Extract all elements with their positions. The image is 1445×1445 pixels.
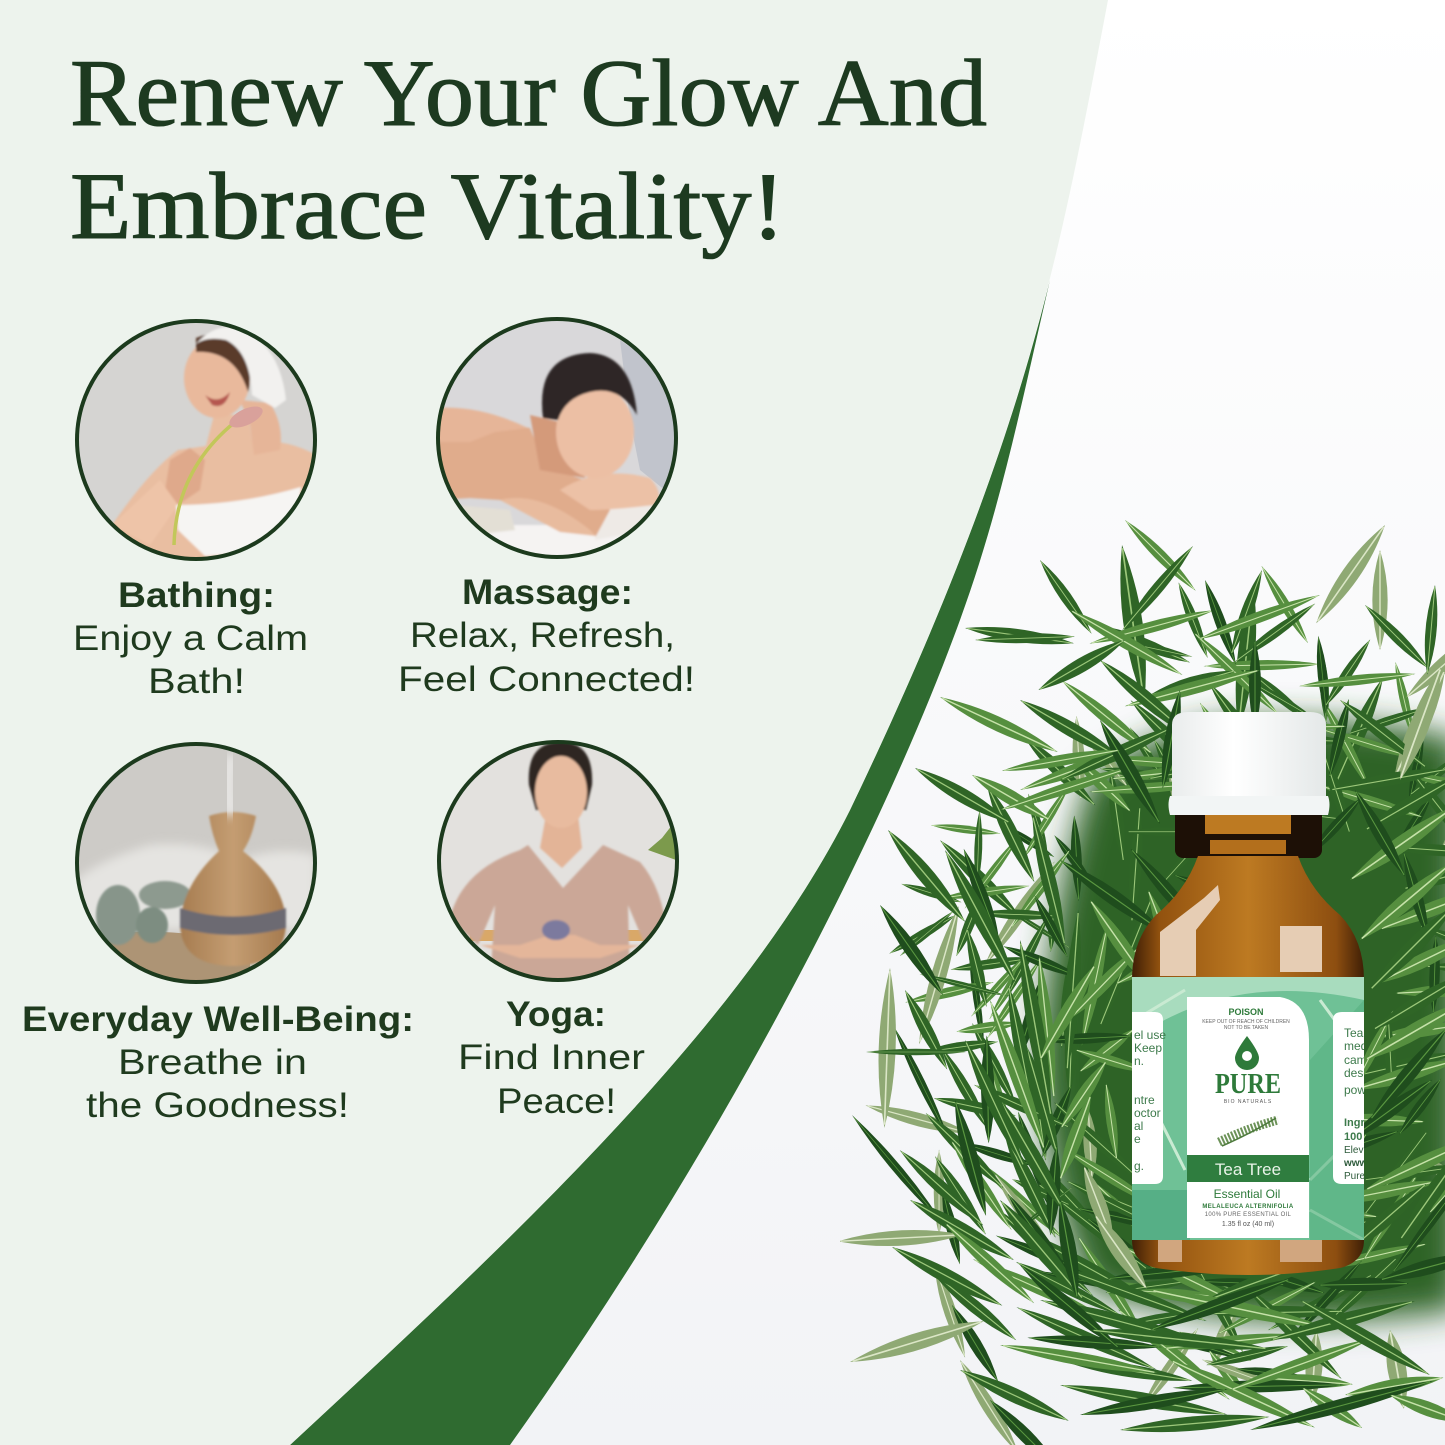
label: desc: [1344, 1066, 1369, 1080]
green curved band: [290, 280, 1050, 1445]
bottle cap: [1172, 712, 1326, 800]
label: 1.35 fl oz (40 ml): [1222, 1221, 1274, 1228]
photo: massage: [437, 318, 677, 560]
label: Tea: [1344, 1026, 1364, 1040]
label: [1132, 977, 1369, 1240]
label: e: [1134, 1132, 1141, 1146]
glass highlights: [1160, 885, 1220, 976]
icon: drop logo: [1235, 1036, 1259, 1070]
title: Embrace Vitality!: [70, 153, 785, 259]
pale panel: [0, 0, 1108, 1445]
label: massage: [398, 573, 695, 699]
bottle neck: [1175, 806, 1322, 858]
label: med: [1344, 1039, 1367, 1053]
photo: bathing: [76, 320, 316, 560]
label: massage: Feel Connected!: [398, 660, 695, 699]
tea tree band: [1187, 1155, 1309, 1182]
bottle body: [1132, 856, 1364, 1275]
label: yoga: [458, 995, 645, 1121]
label: POISON: [1228, 1007, 1264, 1017]
bottle: [1132, 712, 1369, 1275]
front label panel: [1187, 997, 1309, 1238]
label: massage: Relax, Refresh,: [410, 616, 675, 655]
label: Pure: [1344, 1171, 1366, 1182]
photo: yoga: [438, 741, 678, 985]
right side panel: [1333, 1012, 1364, 1184]
label: yoga: Peace!: [497, 1082, 616, 1121]
label: www: [1343, 1158, 1368, 1169]
label: massage: Massage:: [462, 573, 633, 612]
label: PURE: [1215, 1069, 1281, 1100]
title: Renew Your Glow And: [70, 40, 987, 146]
label: octor: [1134, 1106, 1161, 1120]
label: pow: [1344, 1083, 1366, 1097]
label: Essential Oil: [1214, 1187, 1280, 1201]
tea tree leaves: [840, 520, 1445, 1445]
label: MELALEUCA ALTERNIFOLIA: [1202, 1204, 1294, 1210]
label: Ingr: [1344, 1117, 1365, 1129]
label: n.: [1134, 1054, 1144, 1068]
title: [70, 40, 987, 259]
icon: sprig: [1219, 1118, 1278, 1146]
label: everyday well-being: Breathe in: [118, 1043, 307, 1082]
label: bathing: Enjoy a Calm: [73, 619, 308, 658]
label: everyday well-being: Everyday Well-Being:: [22, 1000, 414, 1039]
label: everyday well-being: [22, 1000, 414, 1125]
photo: diffuser: [76, 743, 316, 985]
label: el use: [1134, 1028, 1166, 1042]
label: BIO NATURALS: [1224, 1099, 1272, 1105]
label: bathing: Bathing:: [118, 576, 275, 615]
label: bathing: Bath!: [148, 662, 245, 701]
label: 100% PURE ESSENTIAL OIL: [1205, 1212, 1292, 1218]
label: Elev: [1344, 1145, 1363, 1156]
label: bathing: [73, 576, 308, 701]
left side panel: [1132, 1012, 1163, 1184]
label: yoga: Yoga:: [506, 995, 606, 1034]
label: cam: [1344, 1053, 1367, 1067]
label: everyday well-being: the Goodness!: [86, 1086, 349, 1125]
label: yoga: Find Inner: [458, 1038, 645, 1077]
label: KEEP OUT OF REACH OF CHILDREN: [1202, 1019, 1290, 1025]
label: g.: [1134, 1159, 1144, 1173]
label: 100: [1344, 1131, 1362, 1143]
label: NOT TO BE TAKEN: [1224, 1025, 1269, 1031]
label: al: [1134, 1119, 1143, 1133]
label: Tea Tree: [1215, 1160, 1281, 1179]
label: ntre: [1134, 1093, 1155, 1107]
label: Keep: [1134, 1041, 1162, 1055]
